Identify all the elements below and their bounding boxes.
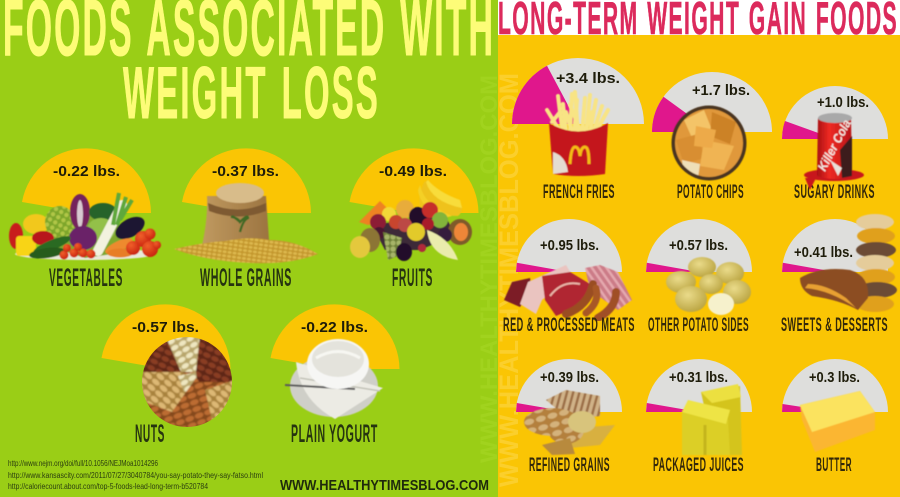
gauge fill: meats — [516, 263, 569, 272]
gauge: fruits — [350, 148, 478, 213]
gauge fill: potato chips — [652, 97, 712, 132]
text: RED & PROCESSED MEATS — [503, 315, 635, 336]
value: potato sides: +0.57 lbs. — [669, 237, 728, 254]
icon: vegetables — [9, 193, 161, 260]
text: OTHER POTATO SIDES — [648, 315, 749, 336]
gauge fill: juices — [646, 403, 699, 412]
value: juices: +0.31 lbs. — [669, 369, 728, 386]
gauge: juices — [646, 359, 752, 412]
gauge: sugary drinks — [782, 86, 888, 139]
icon: whole grains sack — [174, 183, 318, 263]
gauge: nuts — [102, 304, 230, 369]
icon: desserts — [800, 214, 897, 312]
icon: potatoes — [666, 257, 751, 315]
card: plain yogurt — [270, 304, 400, 448]
card: potato chips — [652, 72, 772, 203]
panel: weight loss background — [0, 0, 498, 497]
value: french fries: +3.4 lbs. — [556, 70, 620, 87]
value: vegetables: -0.22 lbs. — [53, 163, 120, 180]
gauge fill: potato sides — [646, 263, 699, 272]
value: potato chips: +1.7 lbs. — [692, 82, 750, 99]
card: butter — [782, 359, 888, 476]
card: refined grains: REFINED GRAINS — [529, 455, 610, 476]
panel: weight gain background — [498, 35, 900, 497]
card: french fries: FRENCH FRIES — [543, 182, 615, 203]
value: butter: +0.3 lbs. — [809, 369, 860, 386]
source link 3: http://caloriecount.about.com/top-5-foods-lead-long-term-b520784 — [8, 482, 208, 491]
value: sugary drinks: +1.0 lbs. — [817, 94, 869, 111]
header band: weight gain title background — [498, 0, 900, 35]
watermark: green side: WWW.HEALTHYTIMESBLOG.COM — [476, 75, 503, 463]
value: refined grains: +0.39 lbs. — [540, 369, 599, 386]
gauge: plain yogurt — [270, 304, 400, 369]
card: potato chips: POTATO CHIPS — [677, 182, 744, 203]
icon: bread — [524, 390, 615, 455]
card: nuts — [102, 304, 235, 448]
gauge fill: sweets — [782, 263, 835, 272]
source link 1: http://www.nejm.org/doi/full/10.1056/NEJMoa1014296 — [8, 459, 158, 468]
icon: juice cartons — [682, 384, 742, 455]
card: butter: BUTTER — [816, 455, 852, 476]
card: packaged juices — [646, 359, 752, 476]
card: french fries — [512, 58, 644, 203]
card: sugary drinks — [782, 86, 888, 203]
gauge fill: sugary drinks — [782, 121, 835, 139]
card: plain yogurt: PLAIN YOGURT — [291, 420, 378, 448]
icon: meats — [504, 265, 632, 318]
website credit: WWW.HEALTHYTIMESBLOG.COM — [280, 477, 489, 494]
card: fruits: FRUITS — [392, 264, 433, 292]
value: fruits: -0.49 lbs. — [379, 163, 447, 180]
card: nuts: NUTS — [135, 420, 165, 448]
value: nuts: -0.57 lbs. — [132, 319, 199, 336]
card: packaged juices: PACKAGED JUICES — [653, 455, 744, 476]
value: sweets: +0.41 lbs. — [794, 244, 853, 261]
value: meats: +0.95 lbs. — [540, 237, 599, 254]
value: whole grains: -0.37 lbs. — [212, 163, 279, 180]
gauge: french fries — [512, 58, 644, 124]
watermark: yellow side: WWW.HEALTHYTIMESBLOG.COM — [494, 73, 524, 487]
gauge: vegetables — [22, 148, 151, 213]
card: whole grains: WHOLE GRAINS — [200, 264, 292, 292]
gauge fill: butter — [782, 404, 835, 412]
icon: butter — [800, 391, 875, 452]
gauge: meats — [516, 219, 622, 272]
icon: nuts — [142, 337, 232, 427]
card: sweets and desserts — [781, 214, 897, 336]
card: red and processed meats — [503, 219, 635, 336]
card: whole grains — [174, 148, 318, 292]
source link 2: http://www.kansascity.com/2011/07/27/3040784/you-say-potato-they-say-fatso.html — [8, 471, 263, 480]
card: fruits — [350, 148, 478, 292]
gauge fill: french fries — [512, 66, 578, 124]
gauge: refined grains — [516, 359, 622, 412]
gauge: potato chips — [652, 72, 772, 132]
card: vegetables — [9, 148, 161, 292]
icon: fruits — [350, 180, 472, 261]
text: WEIGHT LOSS — [123, 53, 380, 134]
icon: french fries — [547, 92, 608, 176]
card: refined grains — [516, 359, 622, 476]
value: plain yogurt: -0.22 lbs. — [301, 319, 368, 336]
icon: cola can: Killer Cola — [814, 117, 854, 173]
gauge fill: refined grains — [516, 403, 569, 412]
gauge: whole grains — [182, 148, 311, 213]
icon: plain yogurt — [285, 339, 383, 419]
gauge: potato sides — [646, 219, 752, 272]
icon: potato chips — [672, 106, 746, 180]
card: other potato sides — [646, 219, 752, 336]
gauge: butter — [782, 359, 888, 412]
gauge: sweets — [782, 219, 888, 272]
source links — [8, 459, 263, 491]
card: vegetables: VEGETABLES — [49, 264, 123, 292]
